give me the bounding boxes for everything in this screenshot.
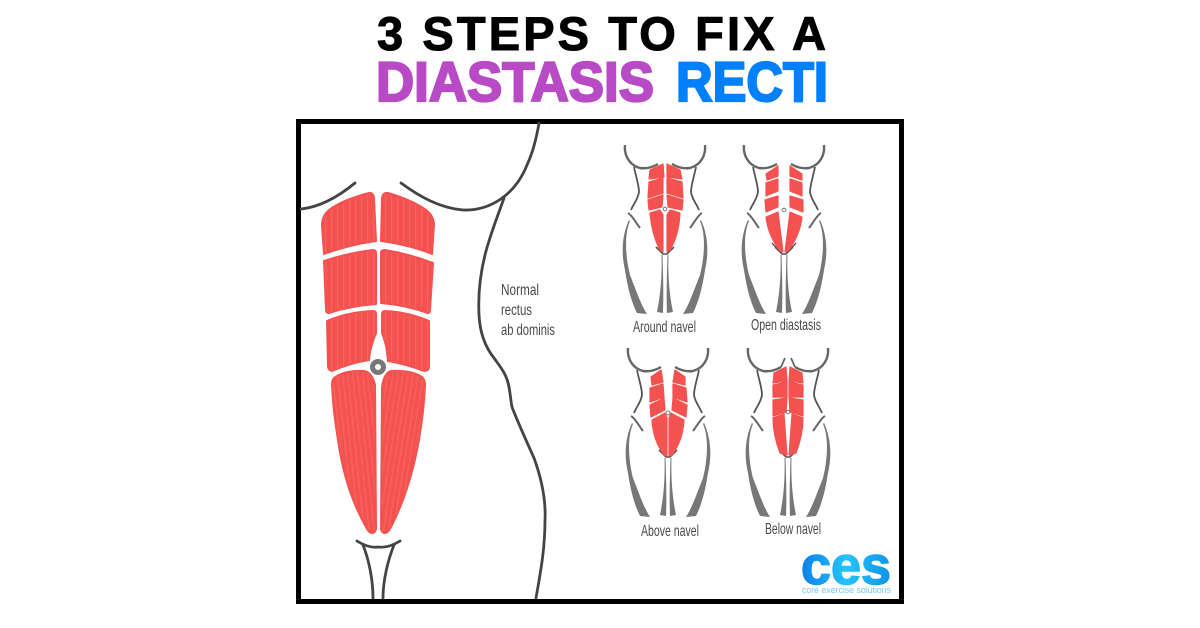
- large torso outline: [301, 123, 545, 598]
- label: normal rectus abdominis: [501, 282, 555, 339]
- caption: around navel: Around navel: [633, 319, 696, 336]
- figure: above navel: [626, 348, 710, 517]
- figure: around navel: [623, 145, 707, 314]
- label: normal rectus abdominis: Normal: [501, 282, 539, 299]
- title word: diastasis: DIASTASIS: [376, 50, 654, 113]
- large rectus abdominis muscle: [322, 193, 434, 533]
- illustration panel: [298, 122, 902, 602]
- label: normal rectus abdominis: ab dominis: [501, 322, 555, 339]
- figure: open diastasis: [742, 145, 826, 314]
- label: normal rectus abdominis: rectus: [501, 302, 532, 319]
- logo: ces: [801, 536, 891, 596]
- title word: recti: RECTI: [676, 50, 828, 113]
- panel frame: [298, 122, 902, 602]
- figure: below navel: [746, 348, 830, 517]
- title: [376, 7, 828, 113]
- muscle lower right: [381, 371, 425, 533]
- muscle row 3: [327, 311, 429, 371]
- muscle row 1: [322, 193, 434, 254]
- logo tagline: core exercise solutions: [802, 585, 891, 596]
- logo letters: ces: [801, 536, 891, 596]
- caption: open diastasis: Open diastasis: [751, 317, 821, 334]
- navel: [372, 362, 384, 372]
- caption: below navel: Below navel: [765, 521, 821, 538]
- caption: above navel: Above navel: [641, 523, 699, 540]
- title line 1: 3 STEPS TO FIX A: [377, 7, 826, 60]
- muscle row 2: [324, 250, 433, 313]
- muscle lower left: [332, 371, 376, 533]
